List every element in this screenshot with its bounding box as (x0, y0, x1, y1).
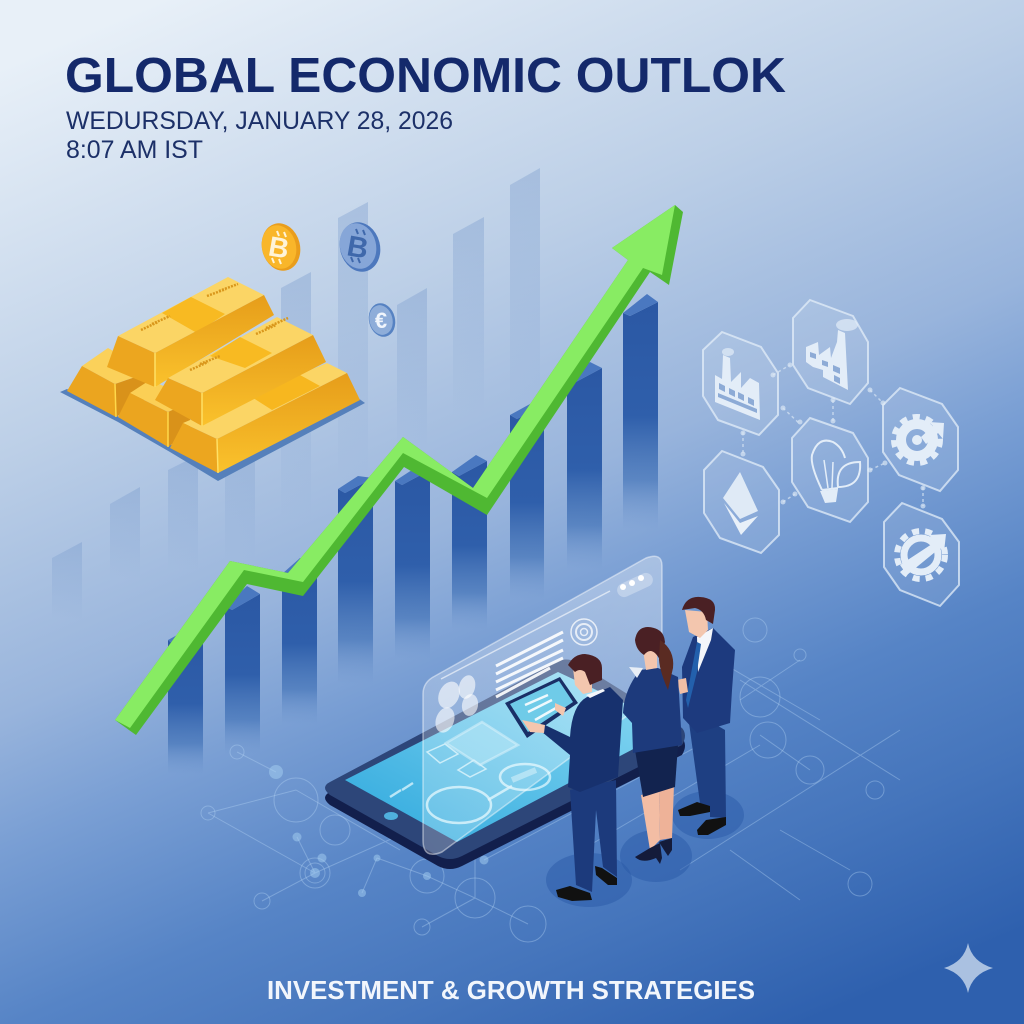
bar chart (168, 294, 658, 775)
date line: WEDURSDAY, JANUARY 28, 2026 (66, 107, 453, 135)
coin: bitcoin blue (335, 218, 385, 276)
coin: euro: € (375, 308, 387, 333)
glass panel target (571, 619, 597, 645)
tablet (325, 556, 685, 869)
icon: factory left (703, 332, 778, 435)
gold bar: back left (67, 348, 150, 417)
gold bars (60, 277, 365, 481)
glass panel dots (615, 571, 655, 599)
icon: ethereum (704, 451, 779, 553)
gold bar: front (170, 363, 360, 473)
icon: growth gear (884, 503, 959, 606)
icon: bulb leaf (792, 418, 868, 522)
coin: bitcoin blue: B (345, 230, 371, 266)
person: man at back right (677, 597, 735, 835)
icon: target gear (883, 388, 958, 491)
coin: bitcoin gold (257, 219, 305, 275)
glass panel text lines (441, 591, 610, 697)
person: man in front (505, 654, 623, 901)
title: GLOBAL ECONOMIC OUTLOK (65, 49, 786, 103)
floor network lines (201, 618, 900, 942)
gold bar: back middle (118, 380, 195, 447)
time line: 8:07 AM IST (66, 136, 203, 164)
held tablet (505, 677, 578, 738)
person: woman (623, 627, 682, 864)
sparkle mark (944, 943, 993, 993)
floor network nodes (269, 765, 488, 897)
tablet screen (345, 672, 675, 842)
glass panel flower (432, 673, 480, 735)
growth arrow (115, 205, 683, 735)
coin: euro (365, 300, 399, 340)
gold bar engravings (141, 284, 288, 370)
icon: factory top (793, 300, 868, 404)
background ghost bars (52, 168, 540, 620)
screen widgets (390, 722, 550, 823)
floor shadows (546, 791, 744, 907)
tablet home button (384, 812, 398, 820)
glass panel (423, 556, 662, 854)
gold bar: top left (107, 277, 274, 387)
icon network connectors (740, 362, 926, 508)
footer caption: INVESTMENT & GROWTH STRATEGIES (267, 975, 755, 1005)
coin: bitcoin gold: B (266, 230, 292, 265)
gold bar: top right (155, 317, 326, 426)
